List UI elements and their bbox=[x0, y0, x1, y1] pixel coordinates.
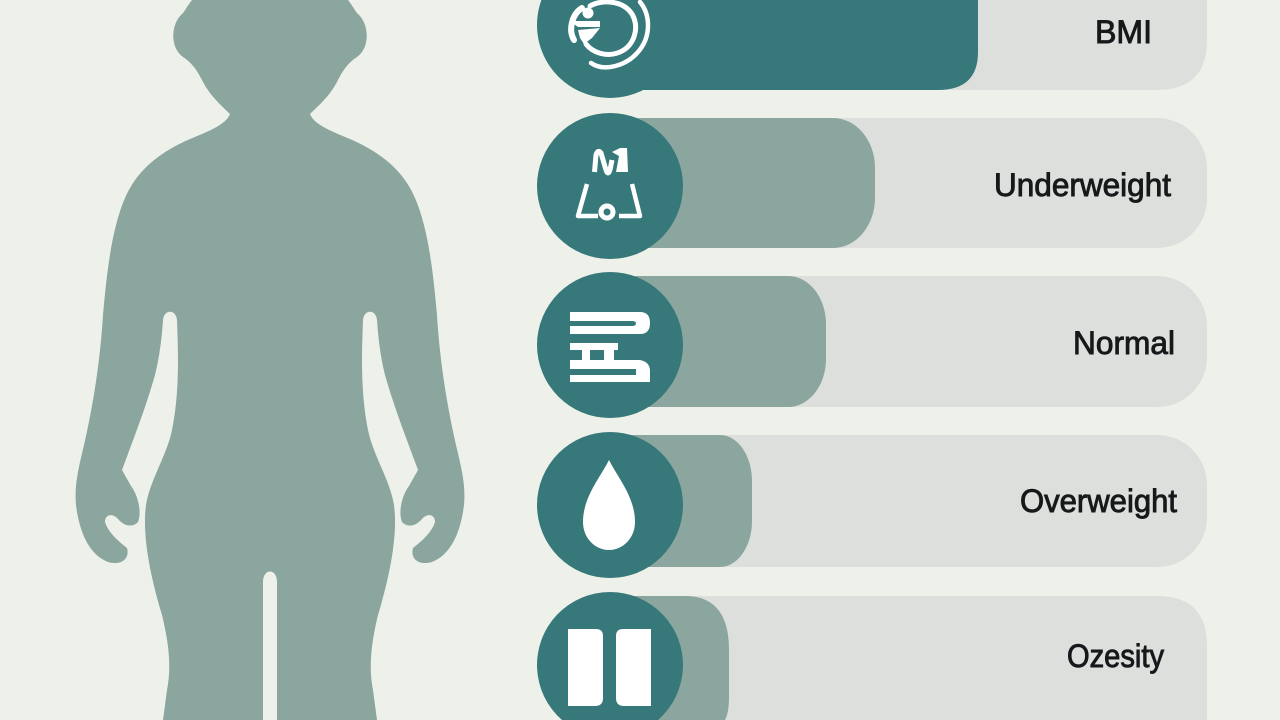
track: Overweight bbox=[600, 435, 1207, 567]
bar: Underweight bbox=[600, 118, 875, 248]
icon: two blocks bbox=[568, 629, 603, 706]
label: BMI: BMI bbox=[1095, 14, 1152, 50]
track: BMI bbox=[600, 0, 1207, 90]
icon circle: Underweight bbox=[537, 113, 683, 259]
row: Normal bbox=[537, 272, 1207, 418]
bar: Obesity bbox=[600, 596, 729, 720]
icon circle: Obesity bbox=[537, 592, 683, 720]
row: Overweight bbox=[537, 432, 1207, 578]
row: Underweight bbox=[537, 113, 1207, 259]
icon: water drop bbox=[583, 460, 635, 550]
track: Obesity bbox=[600, 596, 1207, 720]
label: Obesity: Ozesity bbox=[1067, 638, 1164, 674]
icon circle: Normal bbox=[537, 272, 683, 418]
icon circle: Overweight bbox=[537, 432, 683, 578]
row: BMI bbox=[537, 0, 1207, 98]
bar: Normal bbox=[600, 276, 826, 407]
track: Underweight bbox=[600, 118, 1207, 248]
body silhouette bbox=[76, 0, 464, 720]
row: Obesity bbox=[537, 592, 1207, 720]
bar: Overweight bbox=[600, 435, 752, 567]
track: Normal bbox=[600, 276, 1207, 407]
label: Normal: Normal bbox=[1073, 325, 1175, 361]
label: Overweight: Overweight bbox=[1020, 483, 1177, 519]
label: Underweight: Underweight bbox=[994, 167, 1171, 203]
bar: BMI bbox=[600, 0, 978, 90]
icon circle: BMI bbox=[537, 0, 683, 98]
